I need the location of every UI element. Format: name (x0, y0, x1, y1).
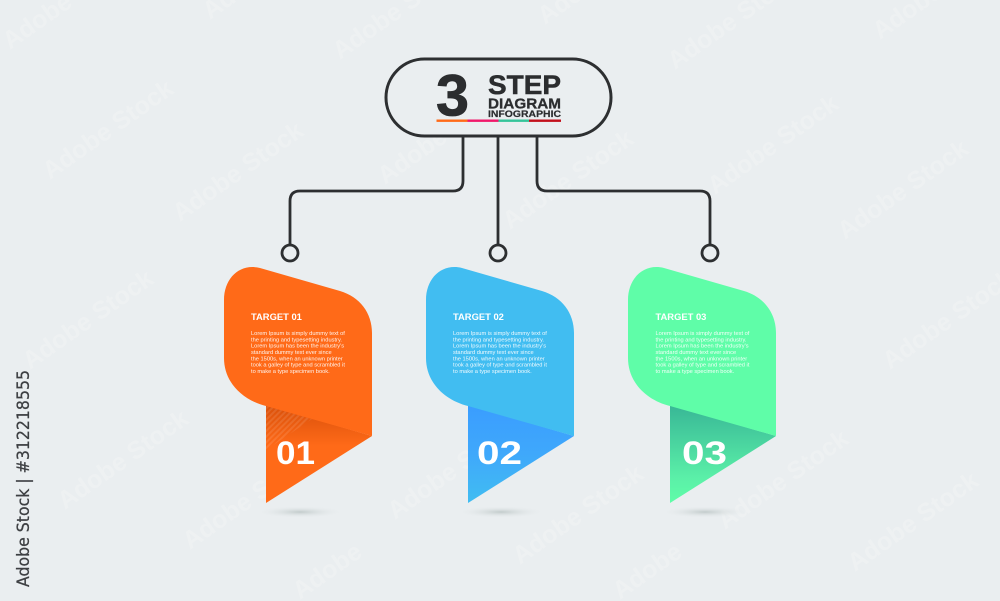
body text: standard dummy text ever since (251, 350, 332, 356)
body text: Lorem Ipsum is simply dummy text of (453, 331, 547, 337)
heading: TARGET 02 (453, 311, 504, 322)
number: 01 (276, 435, 315, 471)
body text: the 1500s, when an unknown printer (251, 356, 343, 362)
title badge (386, 59, 611, 136)
panel: target 02 (426, 267, 574, 518)
title: DIAGRAM: DIAGRAM (488, 96, 561, 112)
body text: took a galley of type and scrambled it (251, 363, 345, 369)
body text (251, 331, 345, 375)
ribbon tail (266, 405, 372, 503)
body text: to make a type specimen book. (656, 369, 735, 375)
watermark pattern: Adobe Stock (37, 74, 179, 185)
body text: the printing and typesetting industry. (656, 337, 747, 343)
watermark pattern: Adobe Stock (832, 134, 974, 245)
card body (628, 267, 776, 436)
title: STEP: STEP (488, 70, 561, 100)
body text: Lorem Ipsum is simply dummy text of (251, 331, 345, 337)
card body (426, 267, 574, 436)
body text: to make a type specimen book. (251, 369, 330, 375)
body text: Lorem Ipsum has been the industry's (656, 344, 749, 350)
watermark pattern: Adobe Stock (702, 89, 844, 200)
body text: standard dummy text ever since (656, 350, 736, 356)
connector lines (282, 136, 718, 261)
stock id caption: Adobe Stock | #312218555 (14, 370, 33, 587)
watermark pattern: Adobe Stock (712, 424, 854, 535)
body text: the printing and typesetting industry. (453, 337, 544, 343)
watermark pattern: Adobe Stock (497, 124, 639, 235)
body text: the printing and typesetting industry. (251, 337, 342, 343)
floor shadow (661, 506, 749, 518)
heading: TARGET 01 (251, 311, 302, 322)
card body (224, 267, 372, 436)
body text: to make a type specimen book. (453, 369, 532, 375)
body text: Lorem Ipsum is simply dummy text of (656, 331, 750, 337)
watermark pattern: Adobe Stock (842, 466, 984, 577)
heading: TARGET 03 (656, 311, 706, 322)
watermark pattern: Adobe (372, 122, 452, 190)
body text: the 1500s, when an unknown printer (656, 356, 747, 362)
number: 03 (682, 435, 727, 471)
watermark pattern: Adobe Stock (507, 459, 649, 570)
watermark pattern: Adobe Stock (17, 264, 159, 375)
body text: standard dummy text ever since (453, 350, 534, 356)
ribbon tail (670, 405, 776, 503)
body text: Lorem Ipsum has been the industry's (251, 344, 344, 350)
floor shadow (256, 506, 344, 518)
body text (453, 331, 547, 375)
title: numeral 3: 3 (436, 64, 469, 128)
body text (656, 331, 750, 375)
title: INFOGRAPHIC: INFOGRAPHIC (488, 109, 561, 120)
watermark pattern: Adobe Stock (167, 116, 309, 227)
body text: took a galley of type and scrambled it (656, 363, 750, 369)
body text: Lorem Ipsum has been the industry's (453, 344, 546, 350)
number: 02 (477, 435, 522, 471)
watermark pattern: Adobe Stock (382, 414, 524, 525)
body text: took a galley of type and scrambled it (453, 363, 547, 369)
body text: the 1500s, when an unknown printer (453, 356, 545, 362)
panel: target 01 (224, 267, 372, 518)
floor shadow (457, 506, 545, 518)
watermark pattern: Adobe Stock (52, 404, 194, 515)
ribbon tail (468, 405, 574, 503)
watermark pattern: Adobe Stock (177, 444, 319, 555)
panel: target 03 (628, 267, 776, 518)
title: colour underline (436, 120, 561, 122)
